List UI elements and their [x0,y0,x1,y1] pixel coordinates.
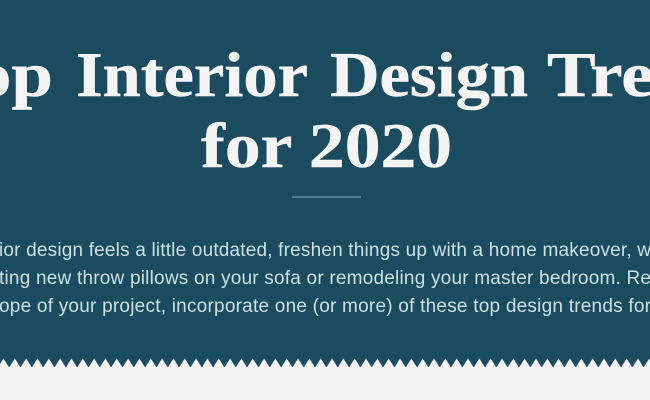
intro paragraph: ting new throw pillows on your sofa or remodeling your master bedroom. Re [0,268,650,289]
divider [292,196,361,198]
title: Interior [76,40,308,110]
intro paragraph: ope of your project, incorporate one (or more) of these top design trends for [0,296,650,317]
light lower band [0,367,650,400]
intro paragraph: ior design feels a little outdated, freshen things up with a home makeover, w [0,240,650,261]
zigzag edge [0,358,650,368]
intro paragraph [0,240,650,317]
title: Design [330,40,528,110]
title: for 2020 [201,111,452,181]
title [0,40,650,181]
